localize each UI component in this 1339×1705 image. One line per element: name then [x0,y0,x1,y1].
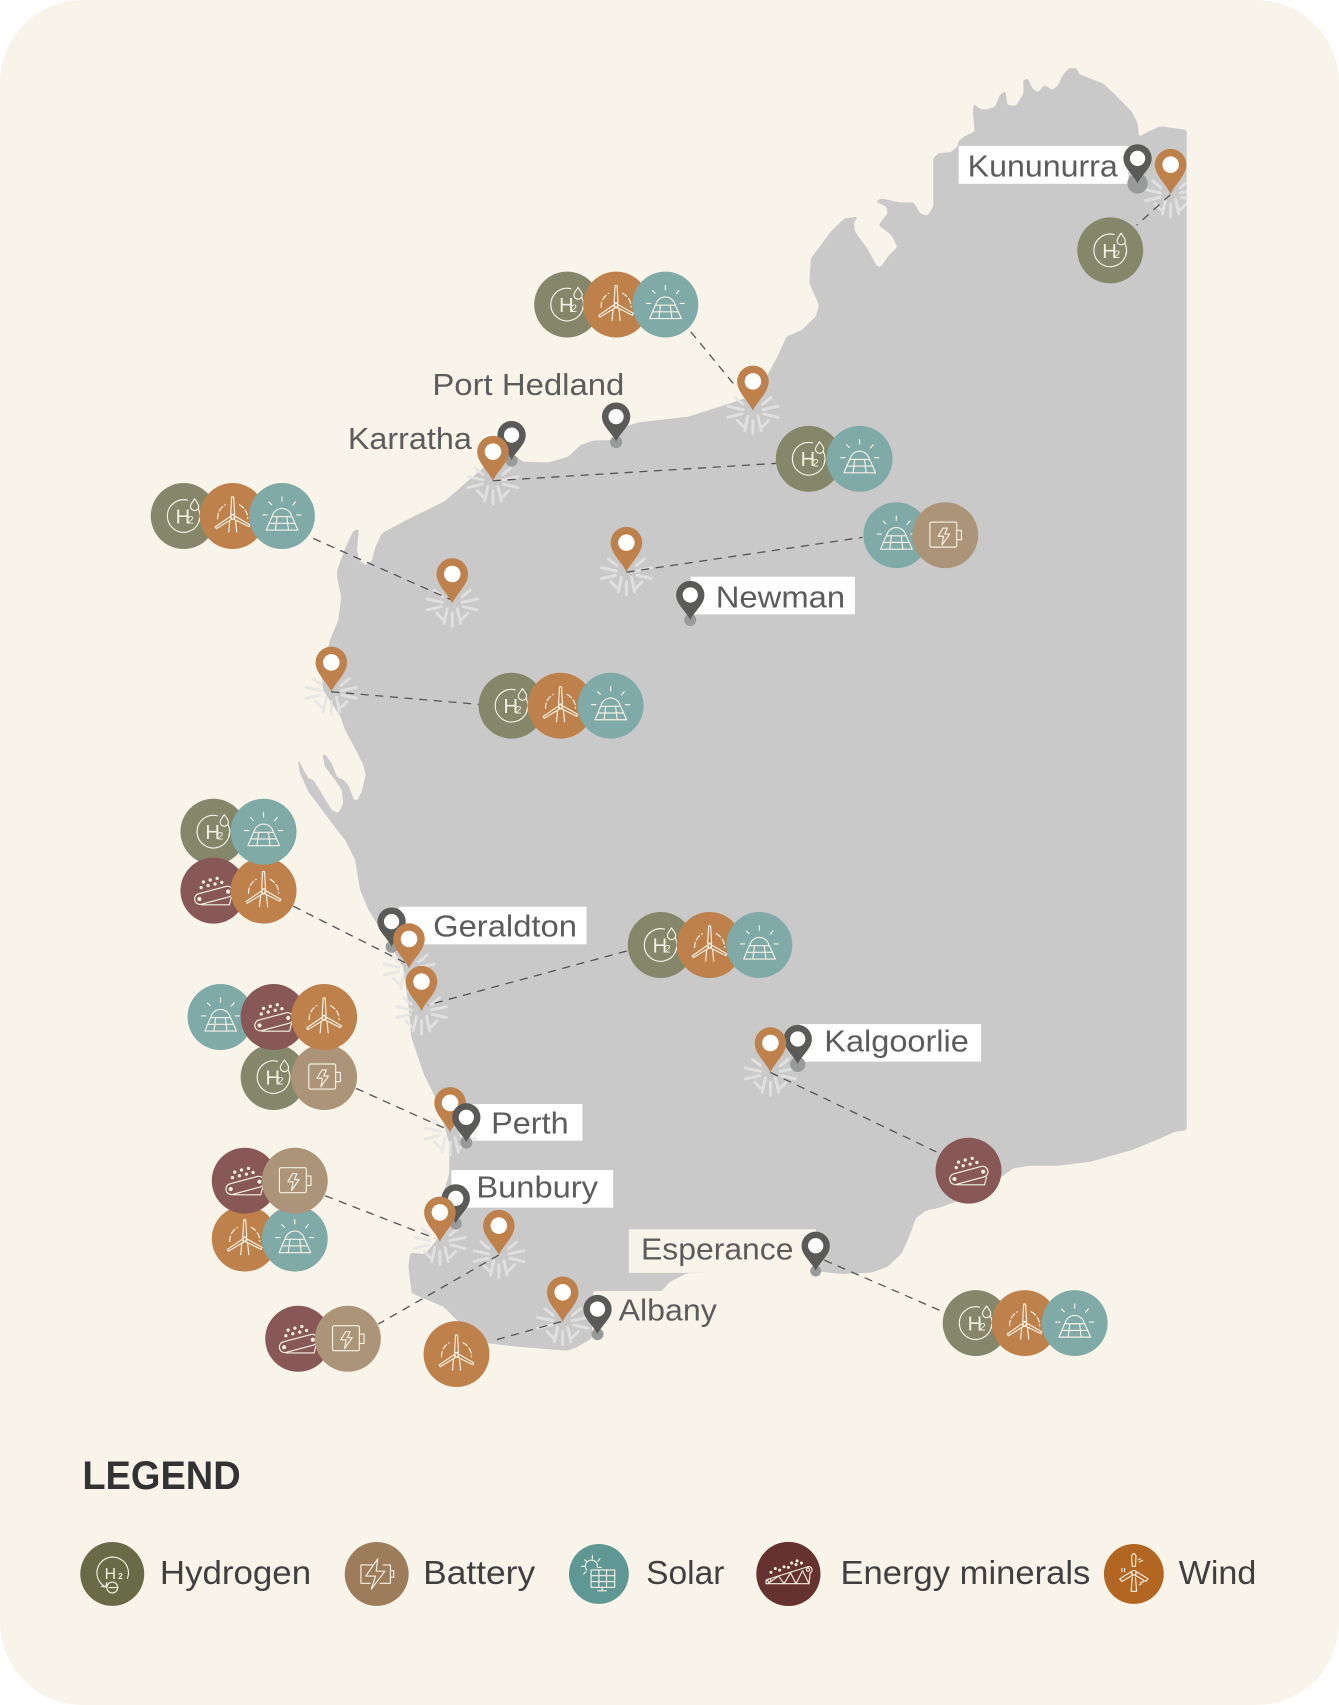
city label: Perth: Perth [491,1106,569,1140]
city label: Bunbury: Bunbury [476,1170,599,1204]
pin: Esperance city [802,1232,830,1271]
city label: Geraldton: Geraldton [433,910,577,944]
legend icon: hydrogen: 2 [118,1572,123,1581]
icon group: Carnarvon hydrogen, wind, solar [479,673,644,739]
pin: Port Hedland city [602,402,630,442]
icon group: Esperance hydrogen, wind, solar: 2 [980,1322,986,1334]
pin: Kalgoorlie city [784,1025,812,1064]
pin: Pilbara west project [437,558,468,603]
pin: Pilbara east project [737,366,769,411]
city label: Kununurra: Kununurra [968,150,1118,184]
icon group: Geraldton north hydrogen, solar, minerals, wind: 2 [217,830,223,842]
icon group: Esperance hydrogen, wind, solar [943,1290,1108,1356]
legend label: hydrogen: Hydrogen [160,1555,311,1592]
icon group: Pilbara hydrogen, wind, solar: 2 [188,515,194,527]
legend icon: hydrogen: H [105,1566,116,1583]
pin: Pilbara inland project [611,527,642,572]
city label: Kalgoorlie: Kalgoorlie [824,1025,969,1059]
pin: Geraldton project south [406,966,437,1011]
legend icon: energy minerals [756,1542,820,1606]
icon group: Albany wind [424,1321,489,1387]
pin: Perth project [434,1087,466,1132]
pin: Carnarvon coast project [316,647,347,692]
icon group: Kalgoorlie energy minerals [936,1138,1001,1204]
pin: Geraldton project north [393,923,425,968]
icon group: Carnarvon hydrogen, wind, solar: H [504,696,518,718]
icon group: Carnarvon hydrogen, wind, solar: 2 [515,704,522,716]
pin: Karratha city [497,421,526,460]
pin: Geraldton city [377,907,406,947]
icon group: south west minerals, battery [265,1306,381,1372]
icon group: north coast hydrogen, wind, solar: H [559,295,574,317]
legend icon: hydrogen [80,1542,144,1606]
pin: Bunbury city [442,1184,470,1223]
icon group: Perth solar, minerals, wind, hydrogen, battery: 2 [277,1076,284,1088]
icon group: Karratha hydrogen, solar [776,426,893,492]
icon group: Geraldton north hydrogen, solar, minerals, wind: H [205,822,220,844]
icon group: north coast hydrogen, wind, solar: 2 [571,303,577,315]
icon group: inland solar, battery [863,502,978,568]
city label: Albany: Albany [619,1294,718,1328]
icon group: Geraldton south hydrogen, wind, solar: 2 [665,944,671,956]
icon group: Karratha hydrogen, solar: 2 [813,457,819,469]
legend heading: LEGEND [82,1453,241,1498]
city label: Port Hedland: Port Hedland [432,368,624,402]
city location dots [386,173,1148,1340]
city label: Esperance: Esperance [641,1232,793,1266]
icon group: Pilbara hydrogen, wind, solar [151,483,315,549]
legend label: wind: Wind [1179,1555,1256,1592]
icon group: Pilbara hydrogen, wind, solar: H [176,506,190,528]
legend icon: battery [345,1542,409,1606]
icon group: Geraldton south hydrogen, wind, solar: H [653,935,667,957]
icon group: Geraldton north hydrogen, solar, minerals, wind [180,799,297,924]
pin: Karratha project [477,436,509,481]
icon group: Perth solar, minerals, wind, hydrogen, battery [188,984,357,1110]
pin: Albany city [583,1295,612,1334]
pin: Kununurra project [1155,149,1186,194]
pin: Kununurra city [1123,144,1152,183]
legend label: battery: Battery [423,1555,536,1592]
pin: Perth city [452,1103,480,1142]
label backgrounds [399,146,1128,1273]
pin: Albany project [547,1277,578,1322]
icon group: Karratha hydrogen, solar: H [801,449,815,471]
dashed leader lines [293,195,1170,1341]
legend icon: solar [569,1544,629,1604]
city label: Karratha: Karratha [348,422,472,456]
icon group: Esperance hydrogen, wind, solar: H [968,1313,982,1335]
icon group: Kununurra hydrogen [1077,217,1143,283]
pin: Bunbury project [424,1197,456,1242]
legend label: energy minerals: Energy minerals [840,1555,1090,1592]
pin: south west project [483,1210,515,1255]
activity bursts under project pins [306,181,1196,1345]
pin: Kalgoorlie project [755,1027,786,1072]
pin: Newman city [676,581,704,620]
legend icon: wind [1104,1544,1164,1604]
city label: Newman: Newman [716,580,845,614]
icon group: Kununurra hydrogen: 2 [1114,249,1120,261]
icon group: Bunbury minerals, battery, wind, solar [212,1148,328,1272]
icon group: north coast hydrogen, wind, solar [534,272,698,338]
icon group: Kununurra hydrogen: H [1102,241,1117,263]
icon group: Geraldton south hydrogen, wind, solar [628,912,792,978]
map of Western Australia [297,68,1187,1351]
legend label: solar: Solar [646,1555,724,1592]
icon group: Perth solar, minerals, wind, hydrogen, battery: H [266,1067,280,1089]
